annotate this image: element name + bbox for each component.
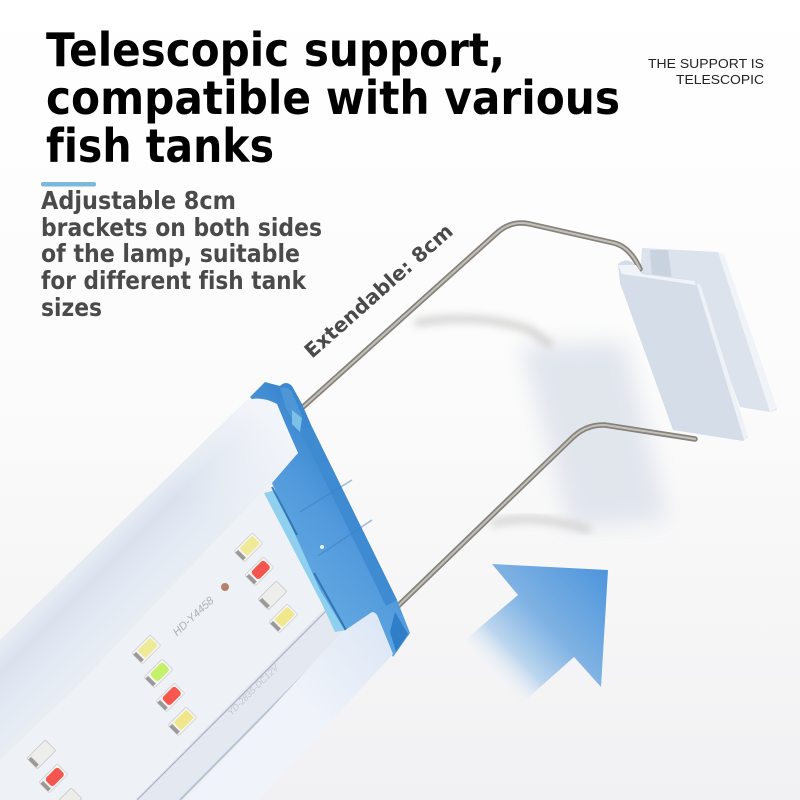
extendable label: Extendable: 8cm — [299, 219, 458, 363]
description: brackets on both sides — [41, 213, 322, 242]
title: compatible with various — [46, 71, 620, 125]
LED group — [27, 533, 298, 800]
title — [46, 23, 620, 173]
channel edge lines — [137, 610, 342, 800]
back plate of clip — [640, 248, 777, 412]
clip front plate — [618, 260, 748, 441]
big blue arrow — [465, 564, 608, 705]
PCB faint print: YD-2835-DC12V — [226, 662, 281, 717]
description: sizes — [41, 293, 102, 322]
description: for different fish tank — [41, 266, 307, 295]
blurred upper wire shadow — [415, 319, 552, 346]
upper white rail — [0, 399, 298, 760]
description: Adjustable 8cm — [41, 186, 236, 215]
rail end highlight — [150, 399, 298, 548]
blurred lower wire shadow — [492, 519, 590, 530]
description: of the lamp, suitable — [41, 239, 300, 268]
PCB red dot — [221, 583, 229, 591]
light blue strip inside cap — [264, 490, 347, 632]
title: fish tanks — [46, 119, 274, 173]
lower translucent channel — [135, 608, 345, 800]
top right caption — [648, 57, 764, 87]
blurred bracket shadow — [520, 342, 668, 528]
title: Telescopic support, — [46, 23, 505, 77]
top right caption: THE SUPPORT IS — [648, 57, 764, 71]
top right caption: TELESCOPIC — [676, 73, 764, 87]
description — [41, 186, 322, 322]
accent bar — [41, 182, 96, 186]
lower white rail — [187, 612, 393, 800]
lamp PCB base — [0, 400, 347, 800]
PCB printed label: HD-Y4458 — [171, 594, 217, 639]
lower steel wire — [398, 425, 695, 606]
blue end cap — [250, 382, 410, 657]
upper steel wire — [303, 223, 640, 407]
